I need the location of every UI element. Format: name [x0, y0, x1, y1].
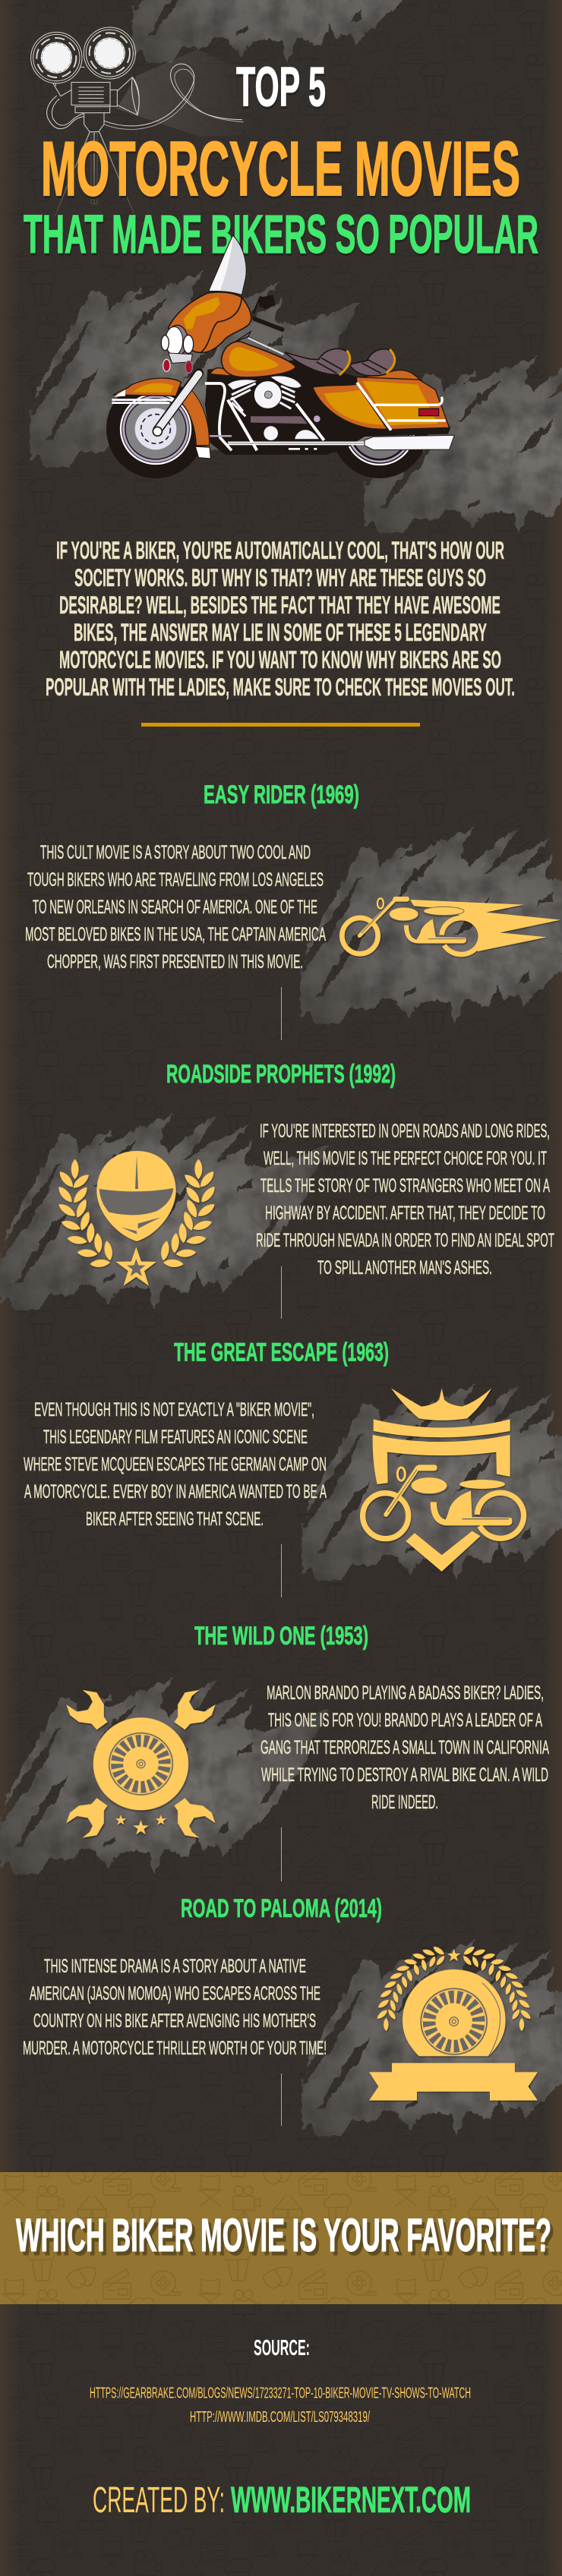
text: road to paloma description: [23, 1956, 327, 2059]
text: the great escape description: A MOTORCYCLE. EVERY BOY IN AMERICA WANTED TO BE A: [24, 1481, 327, 1502]
text: roadside prophets description: [256, 1121, 554, 1279]
icon: wheel with wrenches: [66, 1690, 216, 1838]
text: the great escape description: THIS LEGENDARY FILM FEATURES AN ICONIC SCENE: [43, 1427, 308, 1448]
text: the wild one description: [260, 1682, 549, 1813]
text: the great escape description: BIKER AFTER SEEING THAT SCENE.: [86, 1509, 264, 1530]
panel: the wild one: [0, 1622, 549, 1875]
text: road to paloma description: THIS INTENSE DRAMA IS A STORY ABOUT A NATIVE: [44, 1956, 306, 1977]
icon: crowned shield with motorcycle: [363, 1388, 524, 1572]
intro text: [46, 537, 515, 701]
panel: easy rider: [25, 780, 562, 1025]
icon: helmet with laurels: [56, 1151, 217, 1286]
source url list: HTTP://WWW.IMDB.COM/LIST/LS079348319/: [190, 2409, 370, 2426]
text: road to paloma description: AMERICAN (JASON MOMOA) WHO ESCAPES ACROSS THE: [30, 1983, 320, 2004]
text: easy rider description: THIS CULT MOVIE IS A STORY ABOUT TWO COOL AND: [40, 842, 311, 863]
credit: CREATED BY:: [93, 2480, 225, 2521]
sources: [90, 2336, 471, 2426]
text: easy rider description: CHOPPER, WAS FIRST PRESENTED IN THIS MOVIE.: [47, 951, 303, 973]
title line: top 5: TOP 5: [236, 55, 326, 118]
panel: roadside prophets: [0, 1060, 554, 1311]
panel: road to paloma: [23, 1894, 562, 2137]
text: easy rider description: [25, 842, 326, 973]
brush strokes behind hero: [30, 0, 562, 534]
text: the wild one description: RIDE INDEED.: [371, 1792, 438, 1813]
panel: the great escape: [24, 1338, 562, 1581]
heading: easy rider: EASY RIDER (1969): [204, 780, 359, 809]
text: road to paloma description: COUNTRY ON HIS BIKE AFTER AVENGING HIS MOTHER'S: [33, 2010, 316, 2032]
illustration: touring motorcycle: [106, 235, 454, 478]
heading: road to paloma: ROAD TO PALOMA (2014): [181, 1894, 382, 1923]
text: the great escape description: [24, 1399, 327, 1530]
source url list: [90, 2385, 471, 2426]
heading: the wild one: THE WILD ONE (1953): [194, 1622, 368, 1651]
text: the great escape description: EVEN THOUGH THIS IS NOT EXACTLY A "BIKER MOVIE",: [34, 1399, 314, 1420]
source heading: SOURCE:: [254, 2336, 310, 2360]
text: easy rider description: MOST BELOVED BIKES IN THE USA, THE CAPTAIN AMERICA: [25, 924, 326, 945]
icon: speeding chopper: [342, 897, 560, 954]
banner: call to action: [0, 2172, 562, 2304]
text: easy rider description: TOUGH BIKERS WHO ARE TRAVELING FROM LOS ANGELES: [27, 869, 324, 891]
text: easy rider description: TO NEW ORLEANS IN SEARCH OF AMERICA. ONE OF THE: [33, 897, 317, 918]
title: [24, 55, 538, 265]
icon: film projector: [31, 27, 258, 220]
heading: roadside prophets: ROADSIDE PROPHETS (1992): [166, 1060, 396, 1089]
heading: the great escape: THE GREAT ESCAPE (1963): [174, 1338, 389, 1367]
icon: wheel with laurels and ribbon: [369, 1945, 538, 2101]
credit: [93, 2480, 471, 2521]
